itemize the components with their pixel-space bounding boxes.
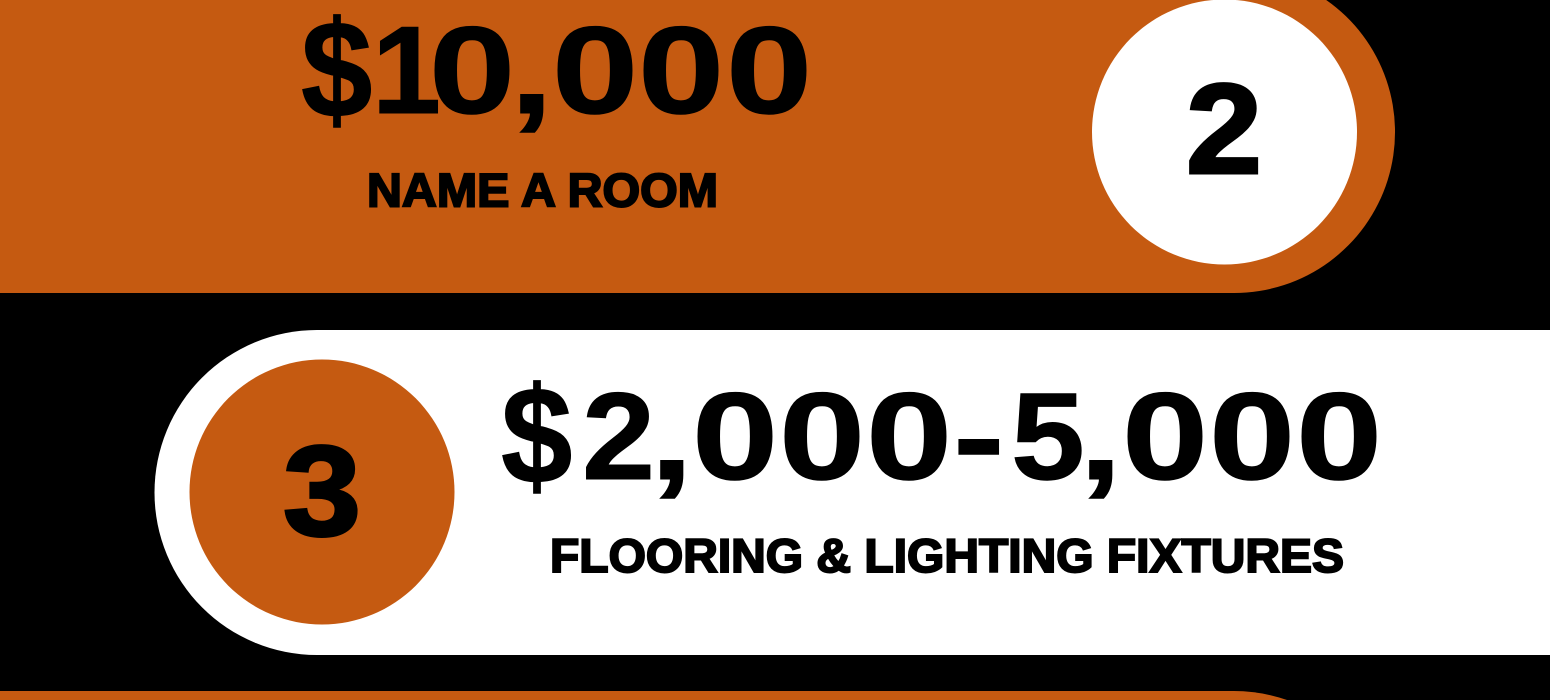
heading: step 3 amount: 5 bbox=[1011, 368, 1085, 506]
heading: step 2 amount: 0 bbox=[429, 2, 515, 140]
icon: step 2 number badge: 2 bbox=[1186, 58, 1262, 201]
panel: next orange bar bbox=[0, 691, 1287, 700]
heading: step 3 amount: 0 bbox=[779, 368, 865, 506]
heading: step 3 amount: 0 bbox=[692, 368, 778, 506]
heading: step 3 amount: - bbox=[953, 368, 1005, 506]
icon: step 3 number badge bbox=[190, 360, 454, 624]
heading: step 3 amount bbox=[495, 370, 1385, 505]
heading: step 3 amount: 2 bbox=[582, 368, 655, 506]
heading: step 3 amount: 0 bbox=[1122, 368, 1208, 506]
panel: step 2 orange bar bbox=[0, 0, 1395, 293]
heading: step 3 amount: 0 bbox=[866, 368, 952, 506]
heading: step 3 amount: $ bbox=[501, 358, 572, 512]
heading: step 2 amount: 0 bbox=[552, 2, 638, 140]
text: step 3 description: FLOORING & LIGHTING FIXTURES bbox=[550, 529, 1344, 582]
heading: step 3 amount: , bbox=[1079, 368, 1122, 506]
heading: step 2 amount: , bbox=[510, 2, 553, 140]
heading: step 3 amount: 0 bbox=[1209, 368, 1295, 506]
heading: step 3 amount: , bbox=[650, 368, 693, 506]
heading: step 2 amount: 0 bbox=[638, 2, 724, 140]
icon: step 3 number badge: 3 bbox=[283, 420, 361, 563]
heading: step 3 amount: 0 bbox=[1296, 368, 1382, 506]
panel: step 3 white bar bbox=[154, 330, 1550, 655]
heading: step 2 amount bbox=[300, 0, 810, 140]
heading: step 2 amount: 0 bbox=[726, 2, 812, 140]
icon: step 2 number badge bbox=[1092, 0, 1357, 264]
heading: step 2 amount: 1 bbox=[372, 2, 441, 140]
text: step 2 description: NAME A ROOM bbox=[367, 164, 718, 216]
